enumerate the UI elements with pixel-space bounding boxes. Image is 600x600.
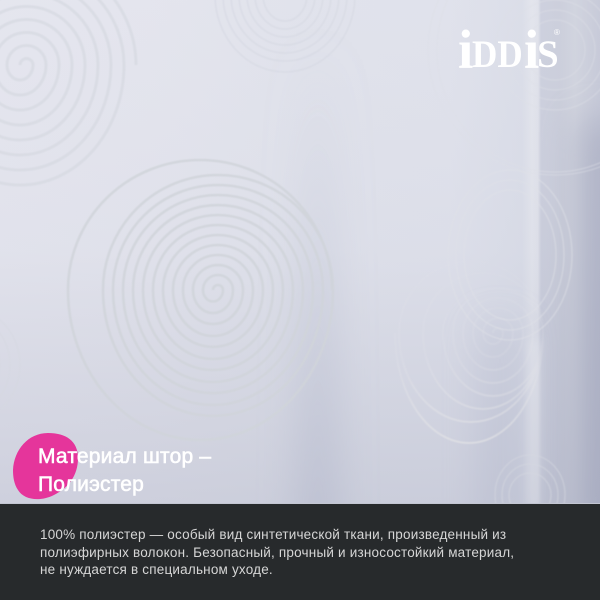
logo	[458, 19, 560, 80]
description text: 100% полиэстер — особый вид синтетической ткани, произведенный из	[40, 527, 506, 542]
heading	[38, 445, 212, 496]
description text: не нуждается в специальном уходе.	[40, 562, 273, 577]
logo: S	[537, 33, 559, 76]
decorative pink blob	[13, 433, 78, 500]
central spiral pattern	[68, 160, 333, 440]
description text: полиэфирных волокон. Безопасный, прочный и износостойкий материал,	[40, 544, 514, 560]
panel: description	[0, 503, 600, 600]
right spiral pattern	[395, 261, 543, 443]
top-left spiral pattern	[0, 0, 136, 185]
upper right spiral pattern	[428, 0, 600, 175]
logo: i	[458, 19, 473, 80]
description text	[40, 527, 514, 577]
heading: Полиэстер	[38, 472, 144, 496]
logo: i	[524, 19, 539, 80]
logo: ®	[554, 28, 560, 37]
lower left and edge spiral fragments	[0, 170, 572, 535]
top-centre spiral pattern	[215, 0, 355, 72]
logo: DD	[472, 33, 523, 76]
heading: Материал штор –	[38, 445, 211, 468]
